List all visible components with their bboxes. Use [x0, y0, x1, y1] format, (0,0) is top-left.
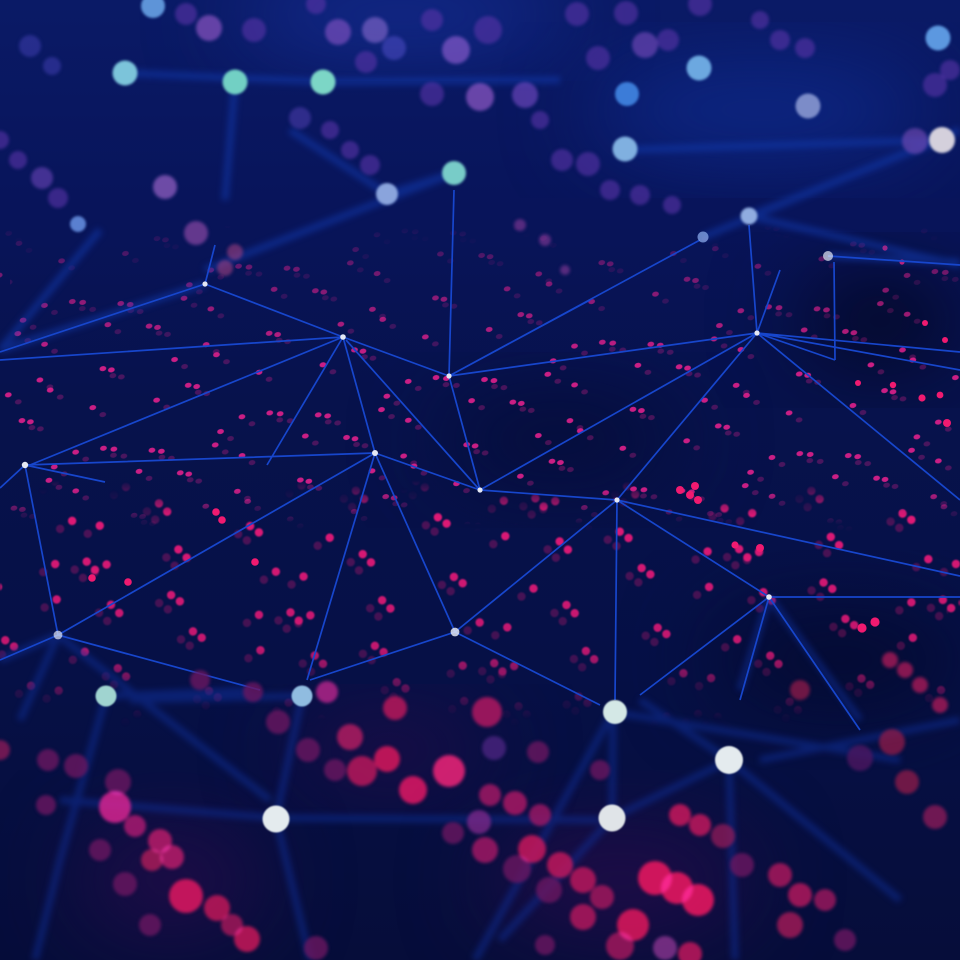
mid pink dot field	[0, 480, 960, 728]
bright pink dots right side	[88, 245, 951, 633]
out-of-focus white nodes, bottom	[96, 686, 743, 832]
out-of-focus pink dots, bottom	[0, 652, 948, 960]
blurred lower network lines	[0, 597, 960, 960]
out-of-focus purple dots, top	[0, 0, 960, 276]
blurred upper network lines	[0, 73, 960, 350]
in-focus pink dot field	[0, 225, 960, 728]
out-of-focus glowing nodes, top	[70, 0, 955, 232]
focused node points	[22, 232, 833, 639]
sharp network lines	[0, 190, 960, 730]
